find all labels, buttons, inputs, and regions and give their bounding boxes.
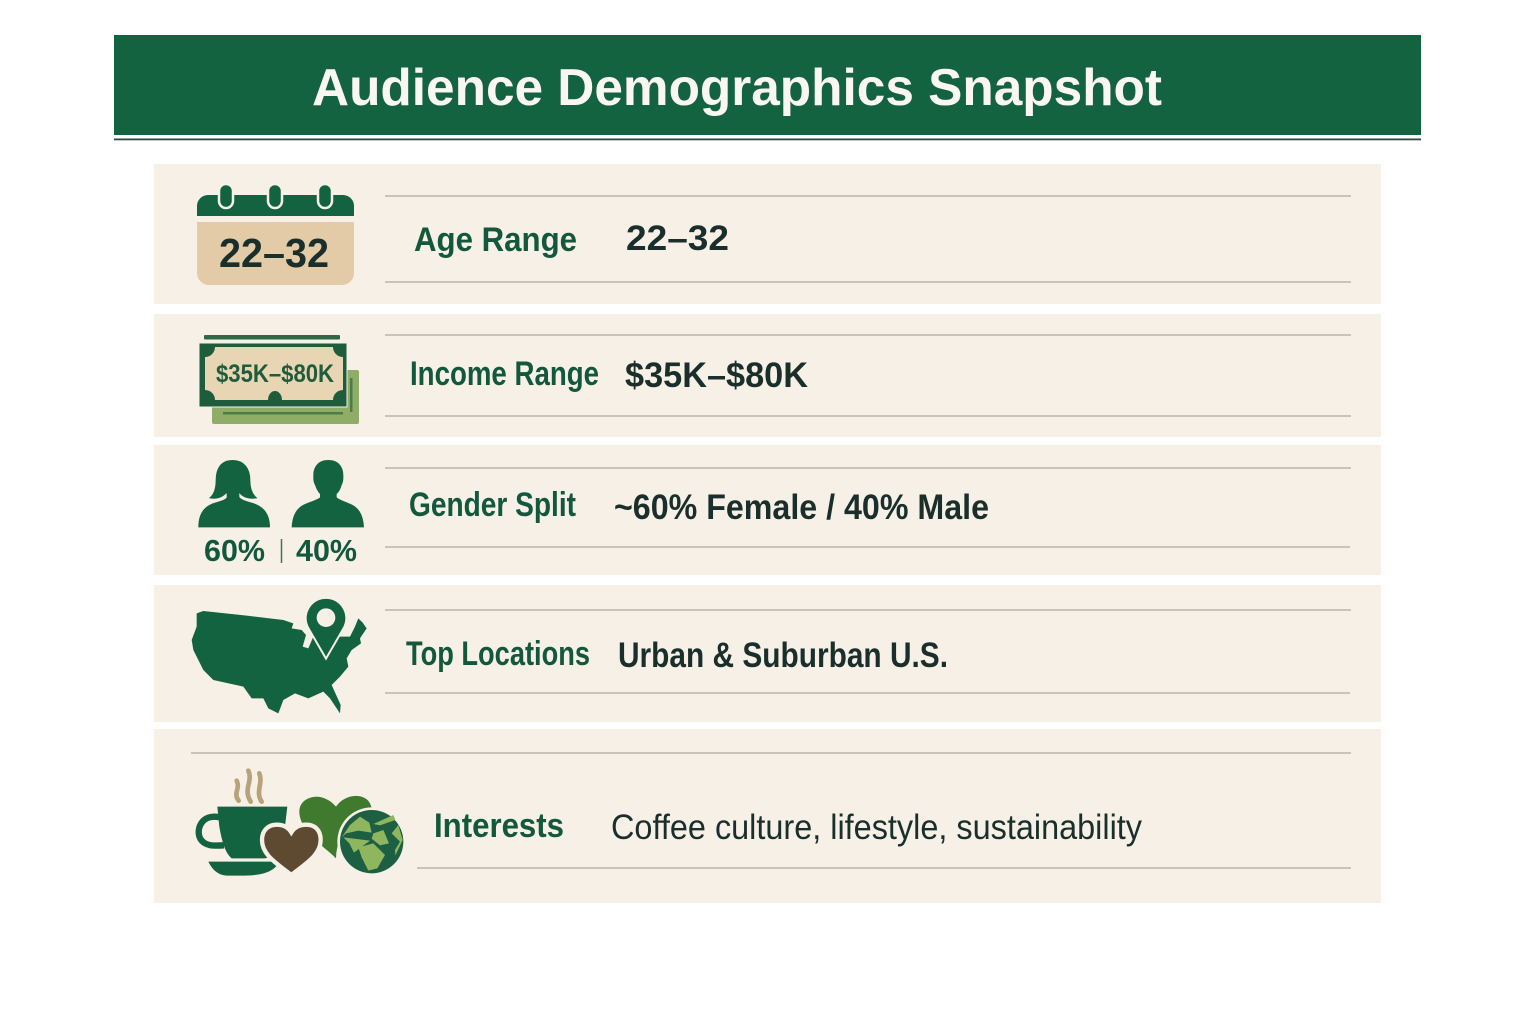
icon: banknotes: $35K–$80K bbox=[216, 360, 334, 388]
title: Audience Demographics Snapshot bbox=[312, 59, 1162, 117]
value: age range: 22–32 bbox=[626, 219, 729, 258]
globe bbox=[337, 807, 406, 876]
cup bbox=[199, 817, 224, 846]
icon: calendar: 22–32 bbox=[219, 230, 329, 276]
panel: age range bbox=[154, 164, 1381, 304]
value: income range: $35K–$80K bbox=[625, 356, 808, 395]
label: interests: Interests bbox=[434, 807, 564, 845]
panel: interests bbox=[154, 729, 1381, 903]
panel: top locations bbox=[154, 585, 1381, 722]
value: interests: Coffee culture, lifestyle, sustainability bbox=[611, 808, 1142, 847]
value: gender split: ~60% Female / 40% Male bbox=[614, 488, 989, 527]
icon: coffee, hearts and globe bbox=[199, 771, 406, 876]
steam bbox=[236, 771, 262, 802]
icon: calendar bbox=[197, 184, 354, 285]
icon: male silhouette bbox=[292, 460, 364, 527]
label: top locations: Top Locations bbox=[406, 635, 590, 673]
icon label: 40 percent: 40% bbox=[296, 533, 357, 568]
icon: US map with pin bbox=[192, 597, 367, 713]
header banner bbox=[114, 35, 1421, 140]
label: income range: Income Range bbox=[410, 355, 599, 393]
green heart bbox=[299, 796, 372, 858]
panel: income range bbox=[154, 314, 1381, 437]
icon: female silhouette bbox=[198, 459, 270, 527]
icon label: 60 percent: 60% bbox=[204, 533, 265, 568]
brown heart bbox=[262, 825, 321, 875]
label: gender split: Gender Split bbox=[409, 486, 576, 524]
panel: gender split bbox=[154, 445, 1381, 575]
value: top locations: Urban & Suburban U.S. bbox=[618, 636, 948, 675]
label: age range: Age Range bbox=[414, 221, 577, 259]
icon: banknotes bbox=[199, 335, 359, 424]
